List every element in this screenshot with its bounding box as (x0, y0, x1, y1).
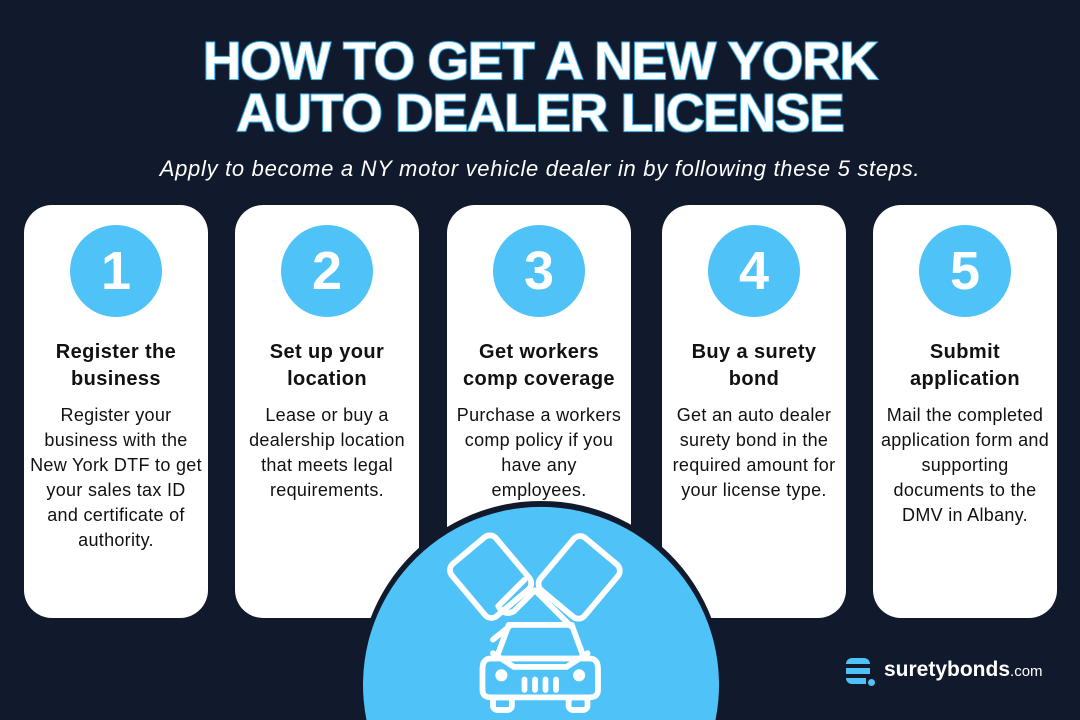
card 1 (24, 205, 208, 618)
card 3 (447, 205, 631, 618)
card 4: Buy a surety (692, 341, 816, 363)
card 2 (235, 205, 419, 618)
card 2: Lease or buy a dealership location that meets legal requirements. (249, 405, 405, 500)
card 3: Purchase a workers comp policy if you have any employees. (457, 405, 621, 500)
title (203, 32, 880, 143)
card 4: 4 (739, 241, 769, 301)
card 1: Register the (56, 341, 176, 363)
card 5: 5 (950, 241, 980, 301)
card 2: location (287, 368, 367, 390)
card 2: Set up your (270, 341, 384, 363)
card 2: 2 (312, 241, 342, 301)
card 5: Submit (930, 341, 1000, 363)
card 5 (873, 205, 1057, 618)
subtitle: Apply to become a NY motor vehicle dealer in by following these 5 steps. (160, 156, 920, 181)
card 3: comp coverage (463, 368, 615, 390)
card 4 (662, 205, 846, 618)
card 3: 3 (524, 241, 554, 301)
card 5: Mail the completed application form and supporting documents to the DMV in Albany. (881, 405, 1049, 525)
logo (846, 658, 1043, 686)
card 3: Get workers (479, 341, 599, 363)
icon: handshake over car (447, 532, 623, 710)
logo: suretybonds.com (884, 658, 1043, 681)
card 5: application (910, 368, 1020, 390)
title: HOW TO GET A NEW YORK (203, 32, 877, 91)
card 4: bond (729, 368, 779, 390)
card 1: 1 (101, 241, 131, 301)
card 1: Register your business with the New York DTF to get your sales tax ID and certificate of authority. (30, 405, 202, 550)
card 4: Get an auto dealer surety bond in the required amount for your license type. (673, 405, 835, 500)
title: AUTO DEALER LICENSE (236, 84, 844, 143)
card 1: business (71, 368, 161, 390)
